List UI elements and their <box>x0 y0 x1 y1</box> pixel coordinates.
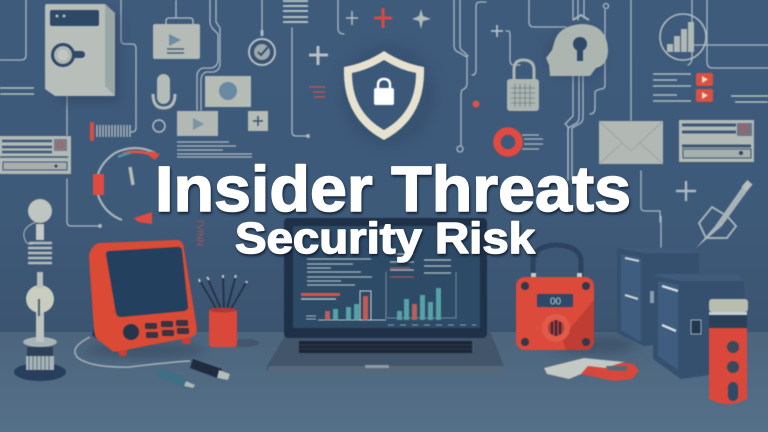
icon: red-capped coil <box>90 122 130 141</box>
chart: laptop with dashboard <box>267 218 505 373</box>
icon: filing cabinets <box>617 248 744 379</box>
icon: text lines center <box>177 142 252 157</box>
icon: red padlock with dial: 00 <box>550 296 561 308</box>
icon: red padlock with dial <box>516 245 635 354</box>
desk surface <box>0 332 768 432</box>
icon: media briefcase <box>153 0 200 59</box>
icon: stacked lines left <box>0 88 34 94</box>
icon: server box with lock <box>45 4 120 104</box>
icon: plus signs and stars <box>309 8 696 201</box>
icon: scientific coil stand <box>14 199 66 381</box>
circuit lines <box>0 0 768 247</box>
icon: stopwatch clock <box>249 30 275 65</box>
icon: red dot <box>472 100 480 108</box>
icon: red target with lines <box>497 131 543 153</box>
wall background <box>0 0 768 333</box>
icon: red pencil cup <box>199 275 259 347</box>
icon: text lines and red play badges <box>653 73 713 102</box>
icon: pen in hexagon <box>696 180 753 248</box>
icon: microphone <box>153 74 175 108</box>
icon: head with keyhole <box>545 15 608 80</box>
icon: grid padlock <box>507 60 539 111</box>
icon: small remote keypad <box>544 358 639 381</box>
icon: small ring <box>153 120 165 132</box>
icon: lines right <box>731 96 768 102</box>
icon: red cylinder device <box>709 299 748 404</box>
faint red wall glyphs: TVINN <box>195 219 205 246</box>
icon: timer gauge ring <box>93 148 160 224</box>
icon: video card <box>177 111 218 136</box>
icon: red handheld monitor <box>85 240 205 358</box>
icon: form panel right <box>679 120 754 162</box>
icon: envelope <box>599 121 663 164</box>
icon: cable and probe pens <box>75 337 230 388</box>
icon: image card <box>205 76 251 107</box>
subtitle: Security Risk: Security Risk <box>235 214 536 263</box>
icon: bar chart circle <box>660 14 706 60</box>
title: Insider Threats: Insider Threats <box>155 153 631 225</box>
icon: security shield with padlock <box>340 43 436 147</box>
icon: plus card <box>248 111 268 131</box>
icon: form panel left <box>0 136 71 174</box>
icon: list lines top <box>283 1 308 22</box>
